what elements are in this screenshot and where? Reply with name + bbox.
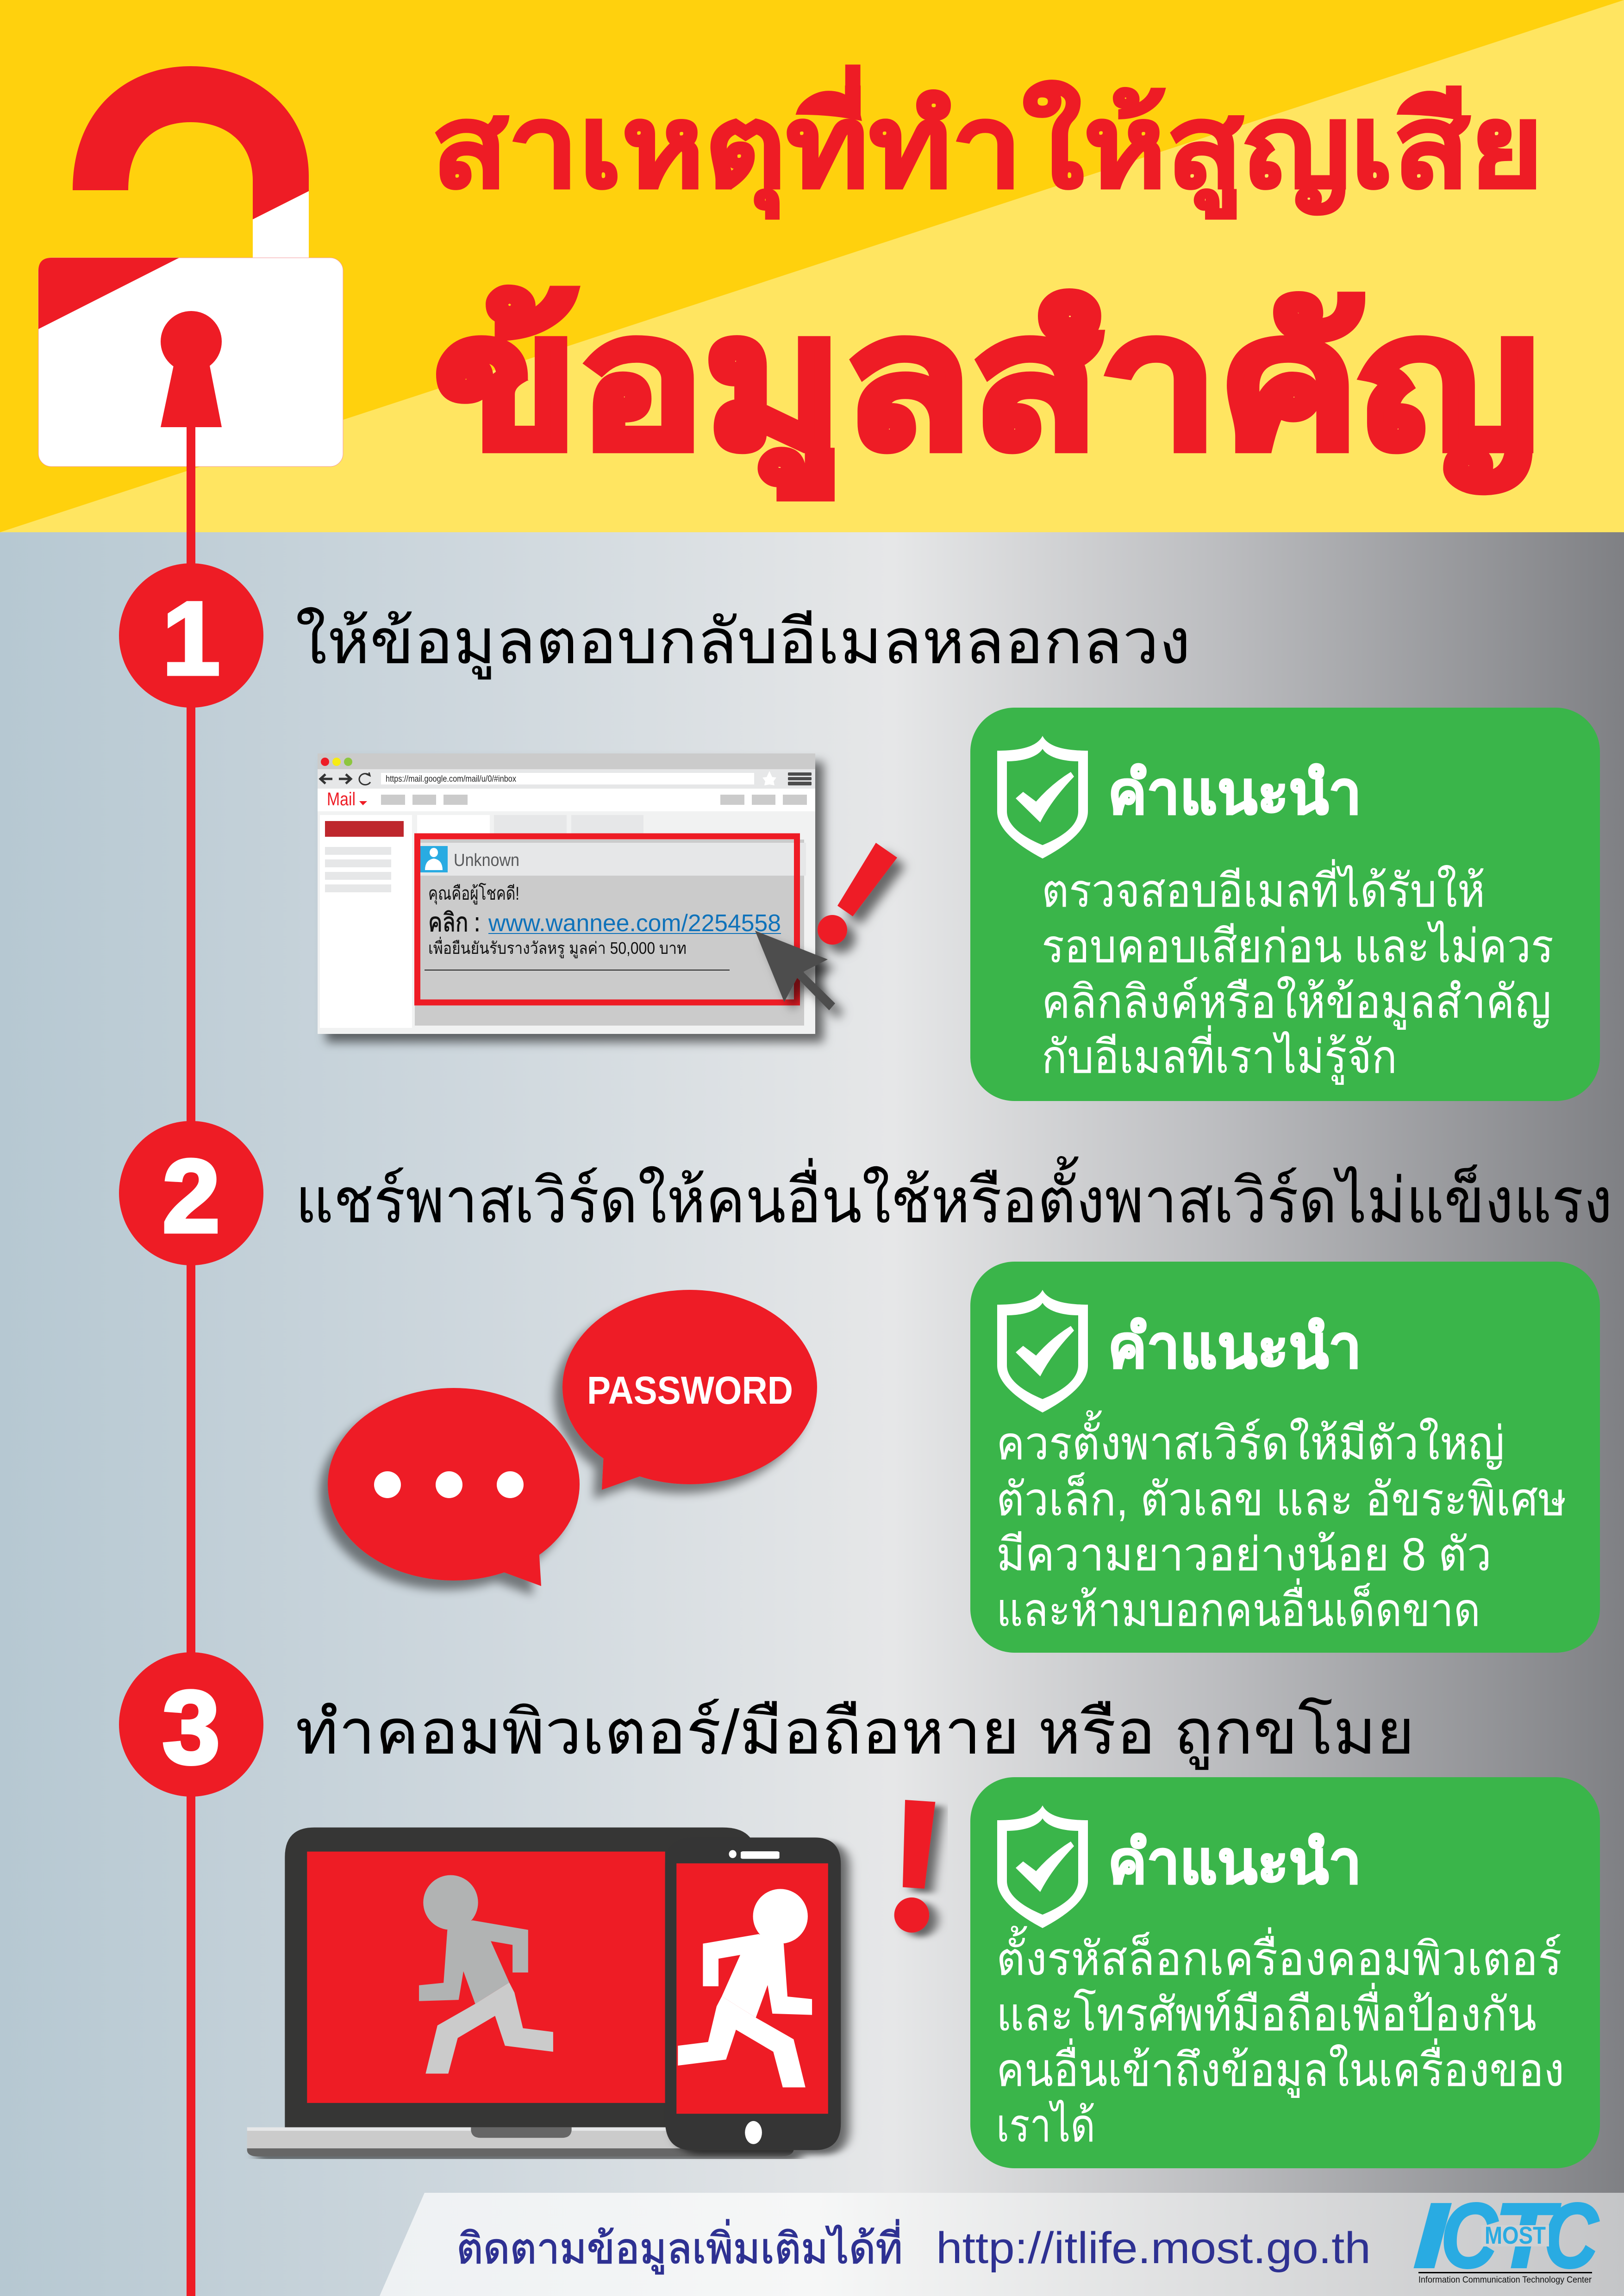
footer band — [380, 2184, 1624, 2296]
email text: เพื่อยืนยันรับรางวัลหรู มูลค่า 50,000 บาท — [428, 937, 687, 958]
panel: advice 1 — [970, 708, 1600, 1101]
star and menu icons — [762, 771, 812, 785]
advice body: ตรวจสอบอีเมลที่ได้รับให้ — [1042, 859, 1485, 917]
illustration: stolen laptop and phone — [247, 1800, 935, 2156]
laptop — [247, 1828, 793, 2156]
title line 1: สาเหตุที่ทำให้สูญเสีย — [431, 66, 1543, 219]
panel: advice 2 — [970, 1262, 1600, 1653]
sender name: Unknown — [454, 851, 519, 870]
icon: shield check — [997, 736, 1088, 859]
icon: exclamation mark — [894, 1800, 935, 1933]
left bubble — [328, 1388, 580, 1586]
advice body: กับอีเมลที่เราไม่รู้จัก — [1042, 1025, 1397, 1085]
step 2 badge — [119, 1121, 263, 1265]
advice body: รอบคอบเสียก่อน และไม่ควร — [1042, 921, 1554, 972]
advice body: และโทรศัพท์มือถือเพื่อป้องกัน — [996, 1983, 1537, 2041]
email text: คุณคือผู้โชคดี! — [428, 883, 519, 905]
logo: ICTC: T — [1494, 2184, 1561, 2287]
advice body: และห้ามบอกคนอื่นเด็ดขาด — [996, 1578, 1480, 1636]
logo: ICTC: MOST — [1485, 2222, 1546, 2249]
step 1 heading: ให้ข้อมูลตอบกลับอีเมลหลอกลวง — [295, 607, 1191, 679]
icon: mouse cursor — [755, 931, 835, 1010]
browser nav arrows — [320, 772, 370, 785]
advice heading: คำแนะนำ — [1108, 1313, 1362, 1381]
timeline line — [187, 426, 195, 2296]
step 1 badge — [119, 563, 263, 708]
email text: www.wannee.com/2254558 — [488, 910, 781, 937]
icon: shield check — [997, 1290, 1088, 1412]
advice body: ตัวเล็ก, ตัวเลข และ อัขระพิเศษ — [996, 1472, 1567, 1525]
email text — [425, 883, 781, 971]
step 2 badge: 2 — [162, 1138, 220, 1254]
panel: advice 3 — [970, 1777, 1600, 2168]
password label: PASSWORD — [587, 1369, 793, 1412]
advice body: คลิกลิงค์หรือให้ข้อมูลสำคัญ — [1042, 976, 1551, 1030]
step 3 heading: ทำคอมพิวเตอร์/มือถือหาย หรือ ถูกขโมย — [295, 1697, 1415, 1770]
background: grey gradient — [0, 532, 1624, 2296]
mail label: Mail — [327, 789, 356, 809]
advice heading: คำแนะนำ — [1108, 1829, 1362, 1896]
advice body — [1042, 859, 1554, 1085]
address bar — [381, 773, 754, 784]
advice body: เราได้ — [996, 2100, 1095, 2152]
logo: ICTC — [1413, 2184, 1599, 2287]
white running figure — [678, 1889, 812, 2087]
footer follow text: ติดตามข้อมูลเพิ่มเติมได้ที่ — [456, 2219, 903, 2274]
icon: open padlock — [38, 66, 343, 467]
address bar: https://mail.google.com/mail/u/0/#inbox — [386, 774, 516, 784]
advice body: ควรตั้งพาสเวิร์ดให้มีตัวใหญ่ — [996, 1410, 1505, 1470]
email text: คลิก : — [428, 908, 480, 937]
logo: ICTC: C — [1543, 2184, 1599, 2287]
advice body — [996, 1410, 1567, 1636]
logo: ICTC: Information Communication Technology Center — [1418, 2275, 1592, 2285]
advice body: มีความยาวอย่างน้อย 8 ตัว — [996, 1529, 1492, 1580]
footer url: http://itlife.most.go.th — [936, 2223, 1371, 2273]
advice body: ตั้งรหัสล็อกเครื่องคอมพิวเตอร์ — [996, 1926, 1562, 1985]
logo: ICTC: C — [1441, 2184, 1499, 2287]
step 1 badge: 1 — [162, 580, 220, 697]
right bubble — [562, 1290, 817, 1490]
advice body — [996, 1926, 1564, 2152]
title line 2: ข้อมูลสำคัญ — [434, 279, 1538, 498]
grey running figure — [419, 1875, 553, 2073]
advice body: คนอื่นเข้าถึงข้อมูลในเครื่องของ — [996, 2038, 1564, 2098]
step 3 badge — [119, 1652, 263, 1797]
icon: shield check — [997, 1805, 1088, 1928]
step 3 badge: 3 — [162, 1669, 220, 1786]
phone — [665, 1837, 841, 2150]
logo: ICTC: I — [1413, 2184, 1450, 2287]
illustration: phishing email window — [318, 753, 897, 1034]
three dots — [374, 1471, 524, 1498]
sender avatar — [420, 846, 448, 872]
advice heading: คำแนะนำ — [1108, 759, 1362, 827]
illustration: chat bubbles — [328, 1290, 817, 1586]
header banner — [0, 0, 1624, 532]
red highlight frame — [418, 836, 797, 1002]
icon: exclamation mark — [818, 843, 897, 945]
